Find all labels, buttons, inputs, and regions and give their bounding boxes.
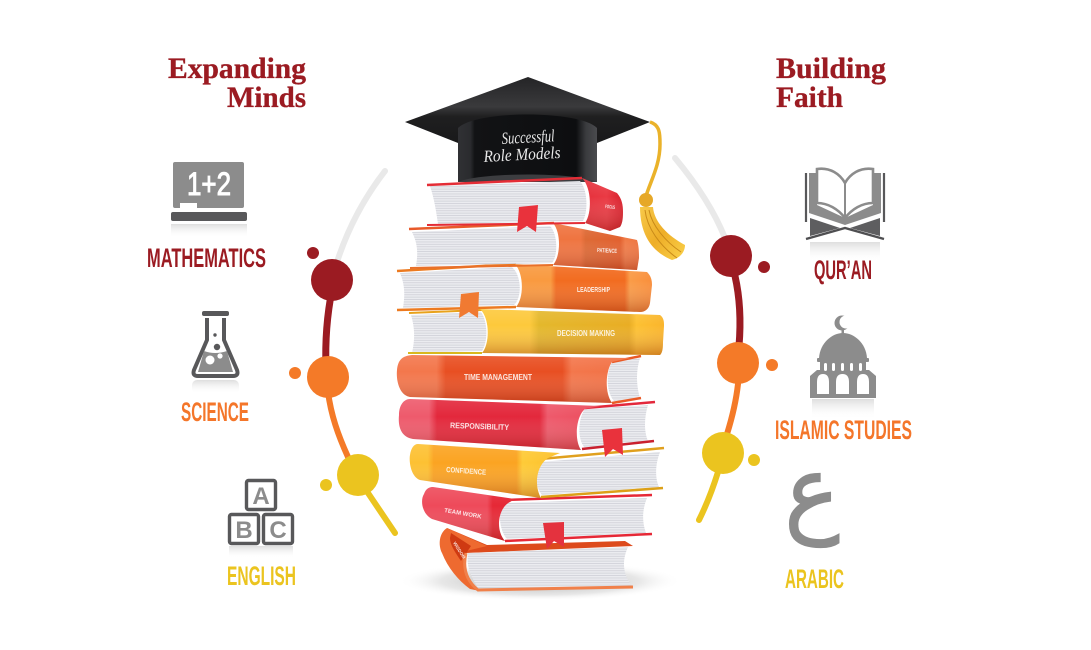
left timeline arc	[289, 171, 395, 533]
heading: Expanding Minds: Expanding	[168, 52, 306, 85]
book 9: bottom: WISDOM	[452, 541, 467, 560]
book 1: focus	[427, 178, 623, 231]
book 2: patience: PATIENCE	[597, 248, 617, 255]
book 3: leadership: LEADERSHIP	[577, 287, 610, 294]
cap inscription: Role Models	[482, 143, 561, 166]
book 6: responsibility	[399, 399, 655, 450]
icon: alphabet blocks: B	[235, 517, 253, 544]
heading: Building Faith: Building	[776, 52, 886, 85]
label: Mathematics: MATHEMATICS	[147, 243, 266, 273]
icon: alphabet blocks: C	[269, 517, 287, 544]
heading: Expanding Minds: Minds	[227, 81, 306, 114]
book 9: bottom	[440, 528, 633, 591]
icon: blackboard 1+2: 1+2	[187, 166, 231, 202]
cap board	[405, 77, 650, 143]
icon: blackboard 1+2	[171, 162, 247, 238]
graduation cap	[405, 77, 685, 260]
book 7: confidence	[410, 444, 664, 498]
icon: Arabic letter ain: ع	[784, 435, 840, 547]
icon: flask	[192, 311, 239, 394]
heading: Building Faith	[776, 52, 886, 114]
cap inscription	[481, 126, 561, 166]
book 8: team work: TEAM WORK	[444, 508, 482, 521]
heading: Expanding Minds	[168, 52, 306, 114]
label: Islamic Studies: ISLAMIC STUDIES	[775, 415, 912, 445]
label: English: ENGLISH	[227, 561, 296, 591]
cap crown	[458, 114, 597, 182]
book stack	[397, 223, 664, 591]
label: Science: SCIENCE	[181, 397, 249, 427]
icon: alphabet blocks	[229, 480, 293, 558]
cap tassel	[639, 122, 685, 260]
right timeline arc	[675, 158, 778, 520]
icon: alphabet blocks: A	[252, 483, 270, 510]
bookmark: orange	[459, 292, 479, 318]
book 7: confidence: CONFIDENCE	[446, 465, 486, 477]
book 3: leadership	[397, 264, 652, 312]
bookmark: red, middle	[602, 428, 623, 457]
label: Arabic: ARABIC	[785, 564, 844, 594]
heading: Building Faith: Faith	[776, 81, 843, 114]
bookmark: red, top	[517, 205, 538, 232]
icon: mosque	[810, 316, 876, 419]
book 4: decision making	[408, 309, 664, 355]
book 8: team work	[422, 487, 652, 541]
book 5: time management	[397, 355, 641, 403]
cap inscription: Successful	[501, 126, 555, 148]
bookmark: red, lower	[543, 522, 564, 549]
book 2: patience	[409, 223, 639, 270]
ground shadow	[398, 561, 682, 601]
icon: open Qur'an on stand	[806, 169, 884, 262]
book 1: focus: FOCUS	[605, 204, 616, 211]
book 4: decision making: DECISION MAKING	[557, 329, 615, 338]
book 6: responsibility: RESPONSIBILITY	[450, 421, 510, 432]
label: Qur'an: QUR’AN	[814, 255, 872, 285]
book 5: time management: TIME MANAGEMENT	[464, 373, 532, 382]
